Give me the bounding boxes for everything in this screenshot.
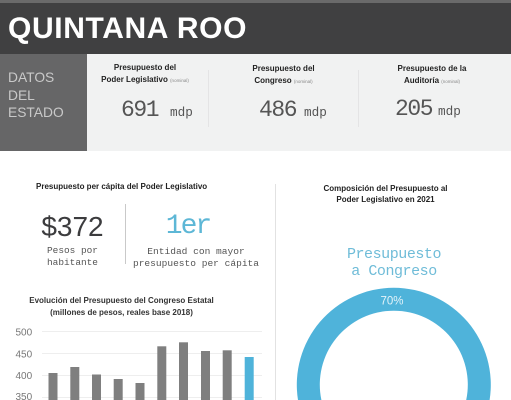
heading: composicion: Poder Legislativo en 2021: [336, 195, 435, 204]
unit: mdp: [304, 104, 327, 120]
top stripe: [0, 0, 511, 3]
label text: ESTADO: [8, 105, 64, 120]
heading: Poder Legislativo (nominal): [101, 75, 189, 84]
donut chart: 70%: [380, 296, 404, 308]
header band: [0, 0, 511, 54]
chart heading: (millones de pesos, reales base 2018): [50, 308, 193, 317]
label text: DEL: [8, 88, 35, 102]
chart heading: [29, 296, 214, 317]
label: presupuesto a congreso: a Congreso: [351, 263, 437, 280]
caption: Entidad con mayor: [147, 246, 245, 257]
value: $372: [41, 211, 104, 242]
label text: [8, 70, 64, 120]
donut chart: [296, 288, 491, 400]
divider 2: [358, 70, 359, 127]
heading: Congreso (nominal): [254, 76, 313, 85]
caption: presupuesto per cápita: [133, 258, 259, 269]
value: 1er: [166, 211, 210, 242]
stat: pesos por habitante: [41, 211, 104, 268]
heading: [101, 63, 189, 84]
panel: datos del estado label: [0, 54, 87, 151]
stat: primer lugar: [133, 211, 259, 269]
caption: habitante: [47, 256, 98, 268]
figure: congreso: [252, 64, 327, 122]
heading: composicion: Composición del Presupuesto al: [323, 184, 448, 192]
panel: budget figures: [87, 54, 511, 151]
heading: Presupuesto de la: [398, 64, 466, 73]
bars: 450: [16, 350, 33, 360]
heading: Auditoría (nominal): [404, 76, 460, 85]
bars: [16, 328, 262, 400]
figure: poder legislativo: [101, 63, 193, 122]
heading: [252, 64, 315, 85]
value: 486: [259, 96, 296, 122]
bars: 500: [16, 328, 33, 338]
value: 205: [395, 96, 432, 122]
caption: Pesos por: [47, 245, 98, 256]
separator: [125, 204, 126, 264]
column divider: [275, 184, 276, 400]
heading: [398, 64, 466, 85]
caption: [47, 245, 98, 268]
bars: 400: [16, 371, 33, 382]
heading: composicion: [323, 184, 448, 204]
heading: per capita: Presupuesto per cápita del Poder Legislativo: [36, 182, 207, 191]
bar chart: evolucion: [16, 296, 262, 400]
heading: Presupuesto del: [252, 64, 315, 73]
label: presupuesto a congreso: [347, 246, 441, 280]
value: 691: [121, 96, 158, 122]
title: QUINTANA ROO: [8, 12, 247, 44]
label: presupuesto a congreso: Presupuesto: [347, 246, 441, 263]
divider 1: [208, 70, 209, 127]
caption: [133, 246, 259, 269]
unit: mdp: [438, 104, 461, 118]
label text: DATOS: [8, 70, 54, 85]
chart heading: Evolución del Presupuesto del Congreso Estatal: [29, 296, 214, 305]
unit: mdp: [170, 104, 193, 120]
heading: Presupuesto del: [114, 63, 176, 72]
figure: auditoria: [395, 64, 466, 122]
